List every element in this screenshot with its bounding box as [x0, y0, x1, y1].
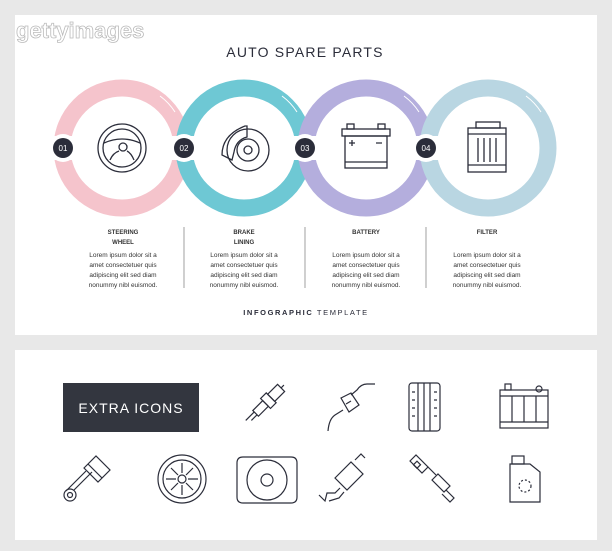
title: AUTO SPARE PARTS — [226, 44, 384, 60]
text: battery — [332, 230, 401, 289]
ring 4 — [414, 88, 548, 208]
text: brake lining: nonummy nibl euismod. — [210, 282, 279, 289]
text: steering wheel: STEERING — [108, 230, 139, 236]
ring 2 — [170, 88, 304, 208]
icon: brake disc — [222, 126, 269, 171]
badge 02: 02 — [180, 144, 189, 153]
badge 03: 03 — [301, 144, 310, 153]
text: filter: amet consectetuer quis — [453, 262, 521, 269]
extra icons label: EXTRA ICONS — [78, 400, 184, 416]
badge 04: 04 — [422, 144, 431, 153]
icon: seatbelt — [410, 455, 454, 502]
text: filter — [453, 230, 522, 289]
text: battery: amet consectetuer quis — [332, 262, 400, 269]
text: filter: FILTER — [477, 230, 498, 236]
text: brake lining: Lorem ipsum dolor sit a — [210, 252, 278, 259]
text: brake lining: LINING — [234, 240, 254, 246]
ring 3 — [292, 88, 426, 208]
text: filter: Lorem ipsum dolor sit a — [453, 252, 521, 259]
text: battery: Lorem ipsum dolor sit a — [332, 252, 400, 259]
icon: fuel nozzle — [328, 384, 375, 431]
badge 01: 01 — [59, 144, 68, 153]
icon: steering wheel — [98, 124, 146, 172]
footer label: INFOGRAPHIC TEMPLATE — [243, 308, 369, 317]
text: steering wheel: Lorem ipsum dolor sit a — [89, 252, 157, 259]
badge 04 — [412, 134, 440, 162]
text: brake lining — [210, 230, 279, 289]
text: battery: adipiscing elit sed diam — [332, 272, 400, 279]
icon: coolant bottle — [510, 456, 540, 502]
icon: muffler — [319, 454, 365, 501]
panel: bottom — [15, 350, 597, 540]
panel: top — [15, 15, 597, 335]
icon: spark plug — [242, 380, 289, 427]
text: steering wheel — [89, 230, 158, 289]
badge 02 — [170, 134, 198, 162]
icon: tire — [409, 383, 440, 431]
text: steering wheel: WHEEL — [112, 240, 134, 246]
text: battery: nonummy nibl euismod. — [332, 282, 401, 289]
text: steering wheel: adipiscing elit sed diam — [89, 272, 157, 279]
extra icons label — [63, 383, 199, 432]
badge 03 — [291, 134, 319, 162]
text: filter: adipiscing elit sed diam — [453, 272, 521, 279]
icon: battery — [342, 124, 390, 168]
separators — [184, 227, 426, 288]
ring 1 — [48, 88, 182, 208]
icon: filter — [468, 122, 506, 172]
icon: radiator — [500, 384, 548, 428]
text: filter: nonummy nibl euismod. — [453, 282, 522, 289]
text: brake lining: adipiscing elit sed diam — [210, 272, 278, 279]
text: brake lining: amet consectetuer quis — [210, 262, 278, 269]
icon: piston — [64, 456, 110, 501]
text: battery: BATTERY — [352, 230, 380, 236]
text: steering wheel: nonummy nibl euismod. — [89, 282, 158, 289]
icon: wheel — [158, 455, 206, 503]
text: brake lining: BRAKE — [233, 230, 255, 236]
badge 01 — [49, 134, 77, 162]
text: steering wheel: amet consectetuer quis — [89, 262, 157, 269]
watermark: gettyimages — [16, 18, 144, 43]
icon: speaker — [237, 457, 297, 503]
